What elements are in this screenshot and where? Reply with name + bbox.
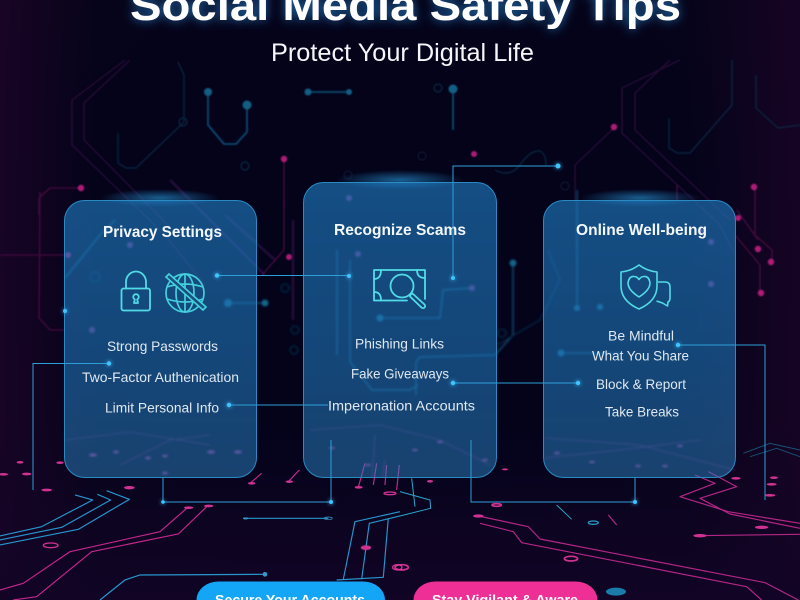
circuit traces: upper background [0, 60, 800, 330]
list: well-being tips: Take Breaks [605, 404, 679, 420]
connector lines and nodes [33, 164, 765, 504]
list: privacy tips: Limit Personal Info [105, 400, 219, 416]
circuit traces: lower left background [0, 461, 402, 600]
subtitle: Protect Your Digital Life [271, 39, 534, 67]
list: privacy tips [82, 338, 239, 416]
list: well-being tips: Block & Report [596, 376, 686, 392]
button: stay vigilant and aware [414, 582, 598, 600]
panel: online well-being [544, 189, 736, 478]
circuit traces: behind cards [65, 180, 735, 478]
icon: banknote with magnifier [374, 270, 425, 308]
list: scam tips [328, 336, 475, 414]
panel: recognize scams [304, 170, 496, 478]
icon: shield with heart and speech bubble [621, 265, 670, 309]
panel: privacy settings [64, 189, 256, 478]
list: well-being tips: What You Share [592, 348, 689, 364]
list: well-being tips: Be Mindful [608, 328, 674, 344]
circuit traces: lower right background [395, 443, 800, 600]
list: well-being tips [592, 328, 689, 420]
icon: padlock [122, 272, 150, 310]
heading: recognize scams: Recognize Scams [334, 222, 466, 239]
list: scam tips: Imperonation Accounts [328, 398, 475, 414]
button: secure your accounts [196, 582, 385, 600]
list: scam tips: Fake Giveaways [351, 366, 449, 382]
heading: online well-being: Online Well-being [576, 222, 707, 239]
heading: privacy settings: Privacy Settings [103, 224, 222, 241]
list: privacy tips: Strong Passwords [107, 338, 218, 354]
list: scam tips: Phishing Links [355, 336, 444, 352]
icon: crossed-out globe [166, 274, 206, 312]
list: privacy tips: Two-Factor Authenication [82, 369, 239, 385]
